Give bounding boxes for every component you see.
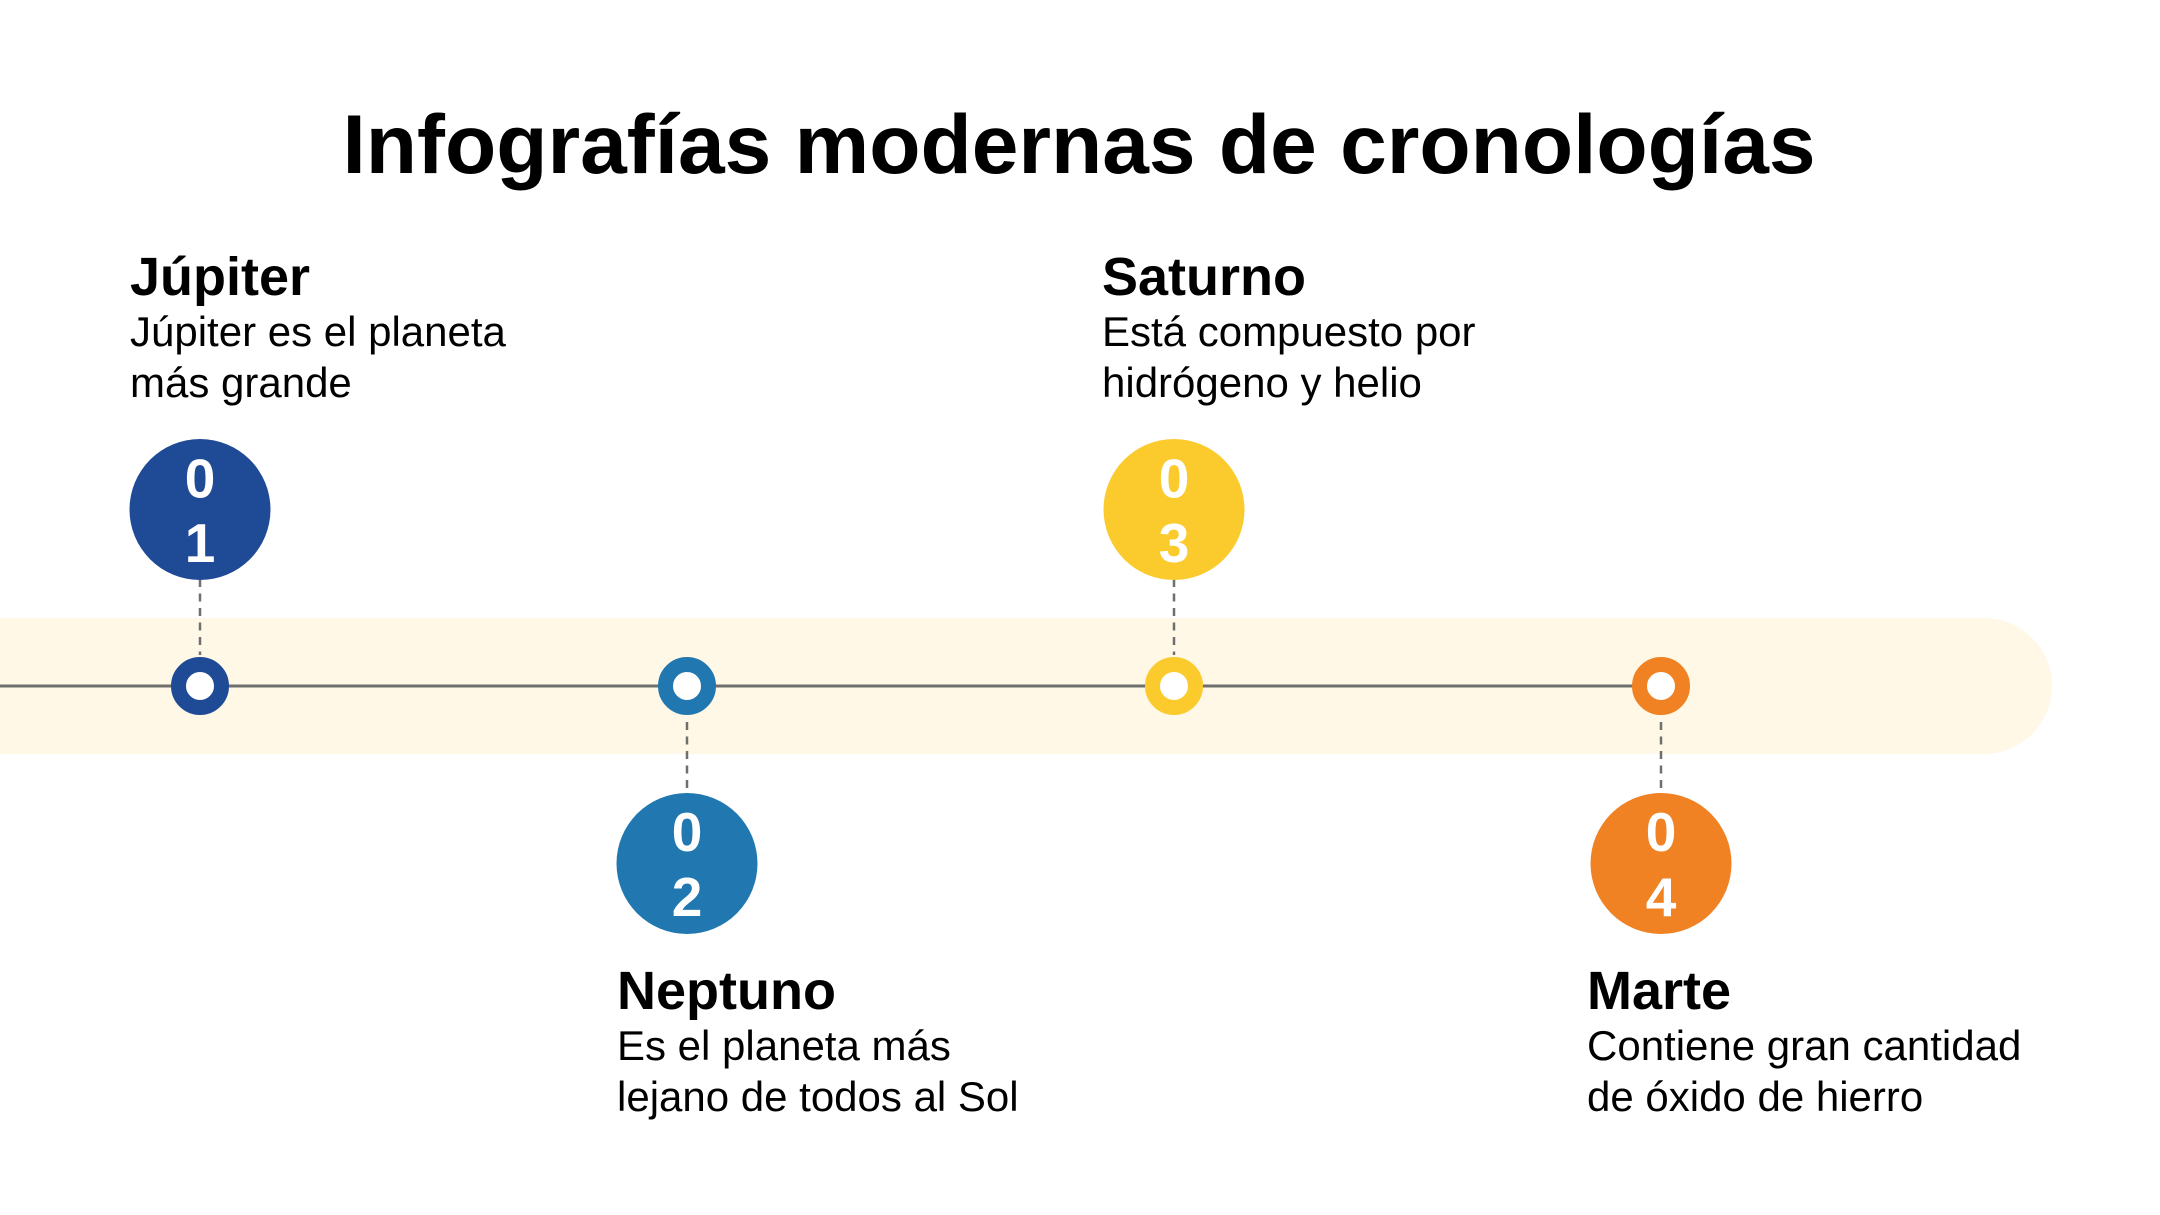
milestone 02: 2	[672, 866, 702, 928]
milestone 03: 0	[1159, 448, 1189, 510]
milestone 02	[616, 664, 758, 934]
text block: Marte: Marte	[1587, 961, 1731, 1021]
timeline line	[0, 684, 1661, 688]
milestone 04	[1590, 664, 1732, 934]
text block: Marte: Contiene gran cantidad	[1587, 1022, 2021, 1069]
milestone 03	[1104, 439, 1244, 708]
text block: Júpiter: Júpiter es el planeta	[130, 308, 506, 355]
text block: Neptuno: Neptuno	[617, 961, 836, 1021]
title: Infografías modernas de cronologías	[342, 97, 1816, 191]
text block: Marte	[1587, 961, 2021, 1120]
timeline band	[0, 618, 2052, 754]
text block: Saturno: Está compuesto por	[1102, 308, 1476, 355]
text block: Marte: de óxido de hierro	[1587, 1072, 1923, 1120]
milestone 04: 4	[1646, 866, 1677, 928]
text block: Júpiter: más grande	[130, 358, 352, 406]
text block: Neptuno: Es el planeta más	[617, 1022, 951, 1069]
text block: Júpiter	[130, 247, 506, 406]
text block: Saturno: Saturno	[1102, 247, 1306, 307]
milestone 04: 0	[1646, 801, 1676, 863]
milestone 03: 3	[1159, 512, 1189, 574]
text block: Neptuno: lejano de todos al Sol	[617, 1072, 1019, 1120]
milestone 01	[130, 439, 270, 708]
milestone 01: 1	[185, 512, 215, 574]
milestone 01: 0	[185, 448, 215, 510]
text block: Saturno: hidrógeno y helio	[1102, 358, 1422, 406]
milestone 02: 0	[672, 801, 702, 863]
text block: Neptuno	[617, 961, 1019, 1120]
text block: Saturno	[1102, 247, 1476, 406]
text block: Júpiter: Júpiter	[130, 247, 310, 307]
